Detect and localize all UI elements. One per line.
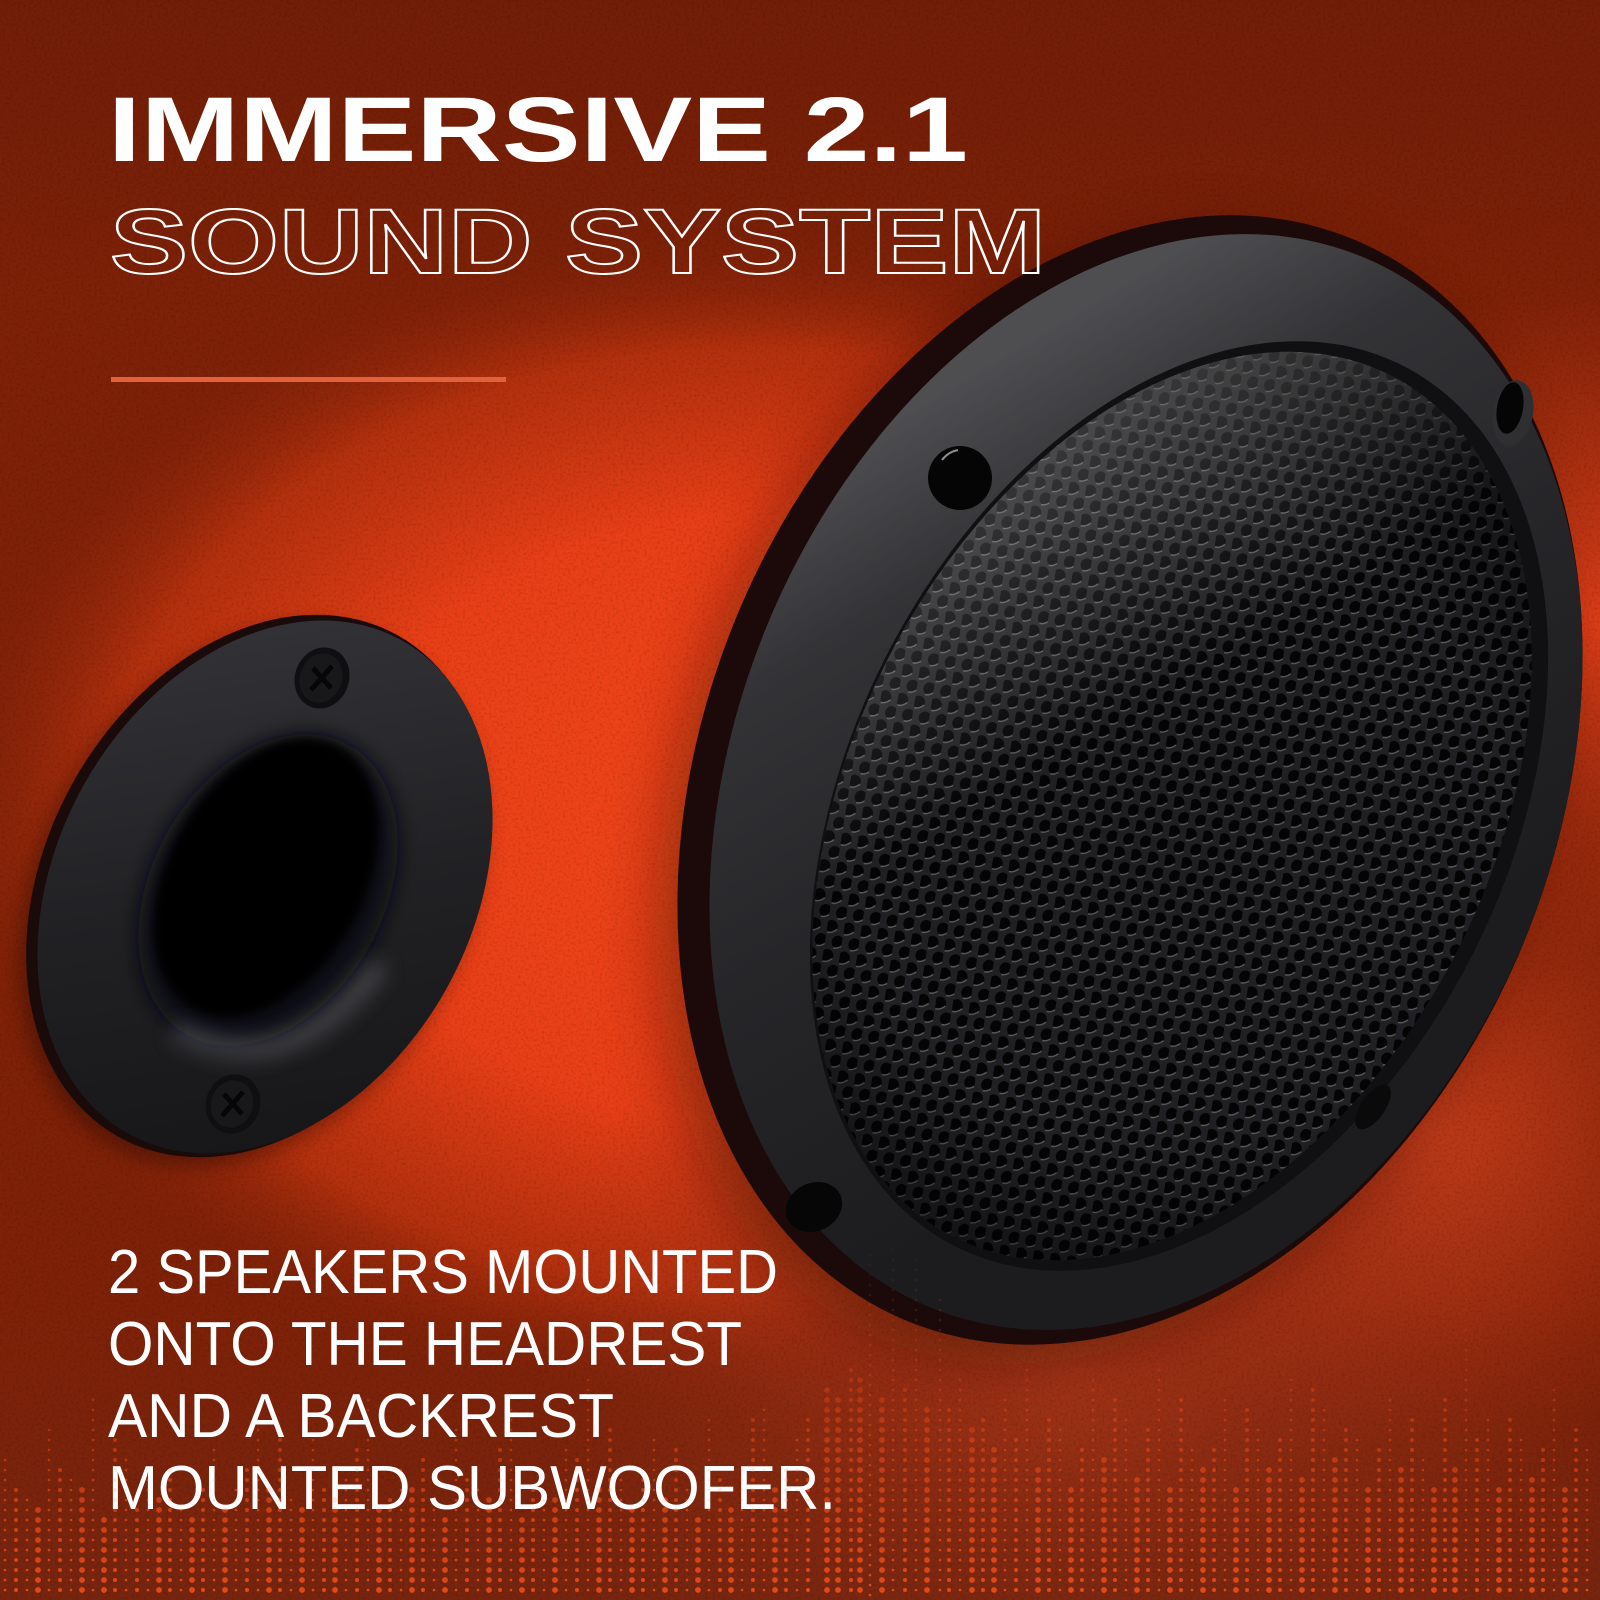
icon: small bass port speaker bbox=[0, 532, 584, 1249]
icon: top phillips screw bbox=[286, 640, 358, 716]
body text block: MOUNTED SUBWOOFER. bbox=[108, 1454, 836, 1523]
title: outlined second line: SOUND SYSTEM bbox=[110, 191, 1046, 293]
title: first line: IMMERSIVE 2.1 bbox=[108, 79, 968, 181]
dot overlay over text bbox=[5, 1225, 1587, 1600]
icon: upper-left mounting hole bbox=[928, 446, 992, 510]
body text block: 2 SPEAKERS MOUNTED bbox=[108, 1238, 778, 1307]
icon: lower-left mounting hole bbox=[778, 1173, 850, 1241]
body text block: ONTO THE HEADREST bbox=[108, 1310, 742, 1379]
body text block bbox=[108, 1238, 836, 1523]
divider line bbox=[111, 377, 506, 382]
icon: bottom phillips screw bbox=[197, 1067, 269, 1141]
decorative sound-wave dot columns bbox=[5, 1225, 1587, 1600]
icon: large speaker with perforated grille bbox=[491, 77, 1600, 1503]
body text block: AND A BACKREST bbox=[108, 1382, 614, 1451]
icon: lower-right mounting hole bbox=[1348, 1079, 1398, 1135]
speaker grille mesh bbox=[668, 230, 1600, 1382]
icon: upper-right mounting hole bbox=[1488, 377, 1538, 449]
